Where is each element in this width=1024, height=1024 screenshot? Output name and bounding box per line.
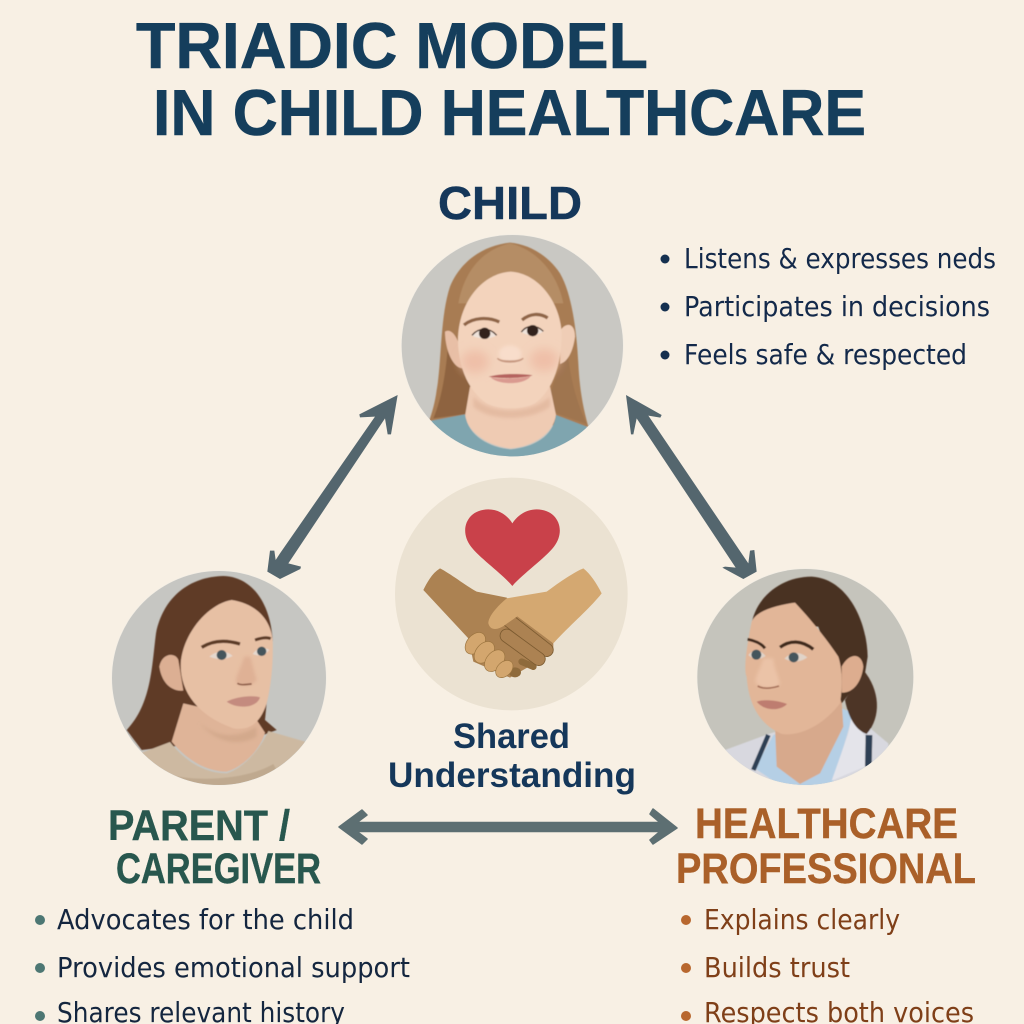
portrait: healthcare professional — [697, 569, 914, 785]
arrow: child to healthcare professional — [626, 395, 757, 579]
arrow: parent to healthcare professional — [339, 809, 677, 844]
center emblem: heart and handshake — [395, 478, 628, 710]
icon: heart — [465, 509, 560, 586]
bullet list: parent / caregiver: Provides emotional support — [57, 952, 410, 984]
bullet list: child: Listens & expresses neds — [684, 243, 996, 275]
title — [136, 9, 866, 149]
bullet list: child: Feels safe & respected — [684, 339, 967, 371]
arrow: child to parent — [267, 395, 398, 579]
label: shared understanding: Understanding — [388, 756, 636, 795]
portrait: child — [402, 235, 623, 456]
bullet list: child — [660, 243, 996, 371]
heading: parent / caregiver: CAREGIVER — [116, 845, 321, 893]
bullet list: healthcare professional: Builds trust — [704, 952, 850, 984]
heading: parent / caregiver: PARENT / — [108, 802, 290, 850]
bullet list: healthcare professional: Explains clearly — [704, 904, 900, 936]
heading: parent / caregiver — [108, 802, 321, 893]
title: TRIADIC MODEL — [136, 9, 648, 82]
bullet list: healthcare professional — [681, 904, 974, 1024]
portrait: parent / caregiver — [112, 571, 326, 785]
heading: child: CHILD — [438, 177, 582, 229]
bullet list: parent / caregiver: Advocates for the child — [57, 904, 354, 936]
icon: handshake — [423, 568, 602, 681]
heading: healthcare professional: HEALTHCARE — [695, 800, 958, 848]
heading: healthcare professional: PROFESSIONAL — [676, 845, 976, 893]
label: shared understanding: Shared — [453, 717, 570, 756]
bullet list: parent / caregiver — [35, 904, 410, 1024]
heading: healthcare professional — [676, 800, 976, 893]
label: shared understanding — [388, 717, 636, 795]
title: IN CHILD HEALTHCARE — [153, 76, 866, 149]
bullet list: child: Participates in decisions — [684, 291, 990, 323]
